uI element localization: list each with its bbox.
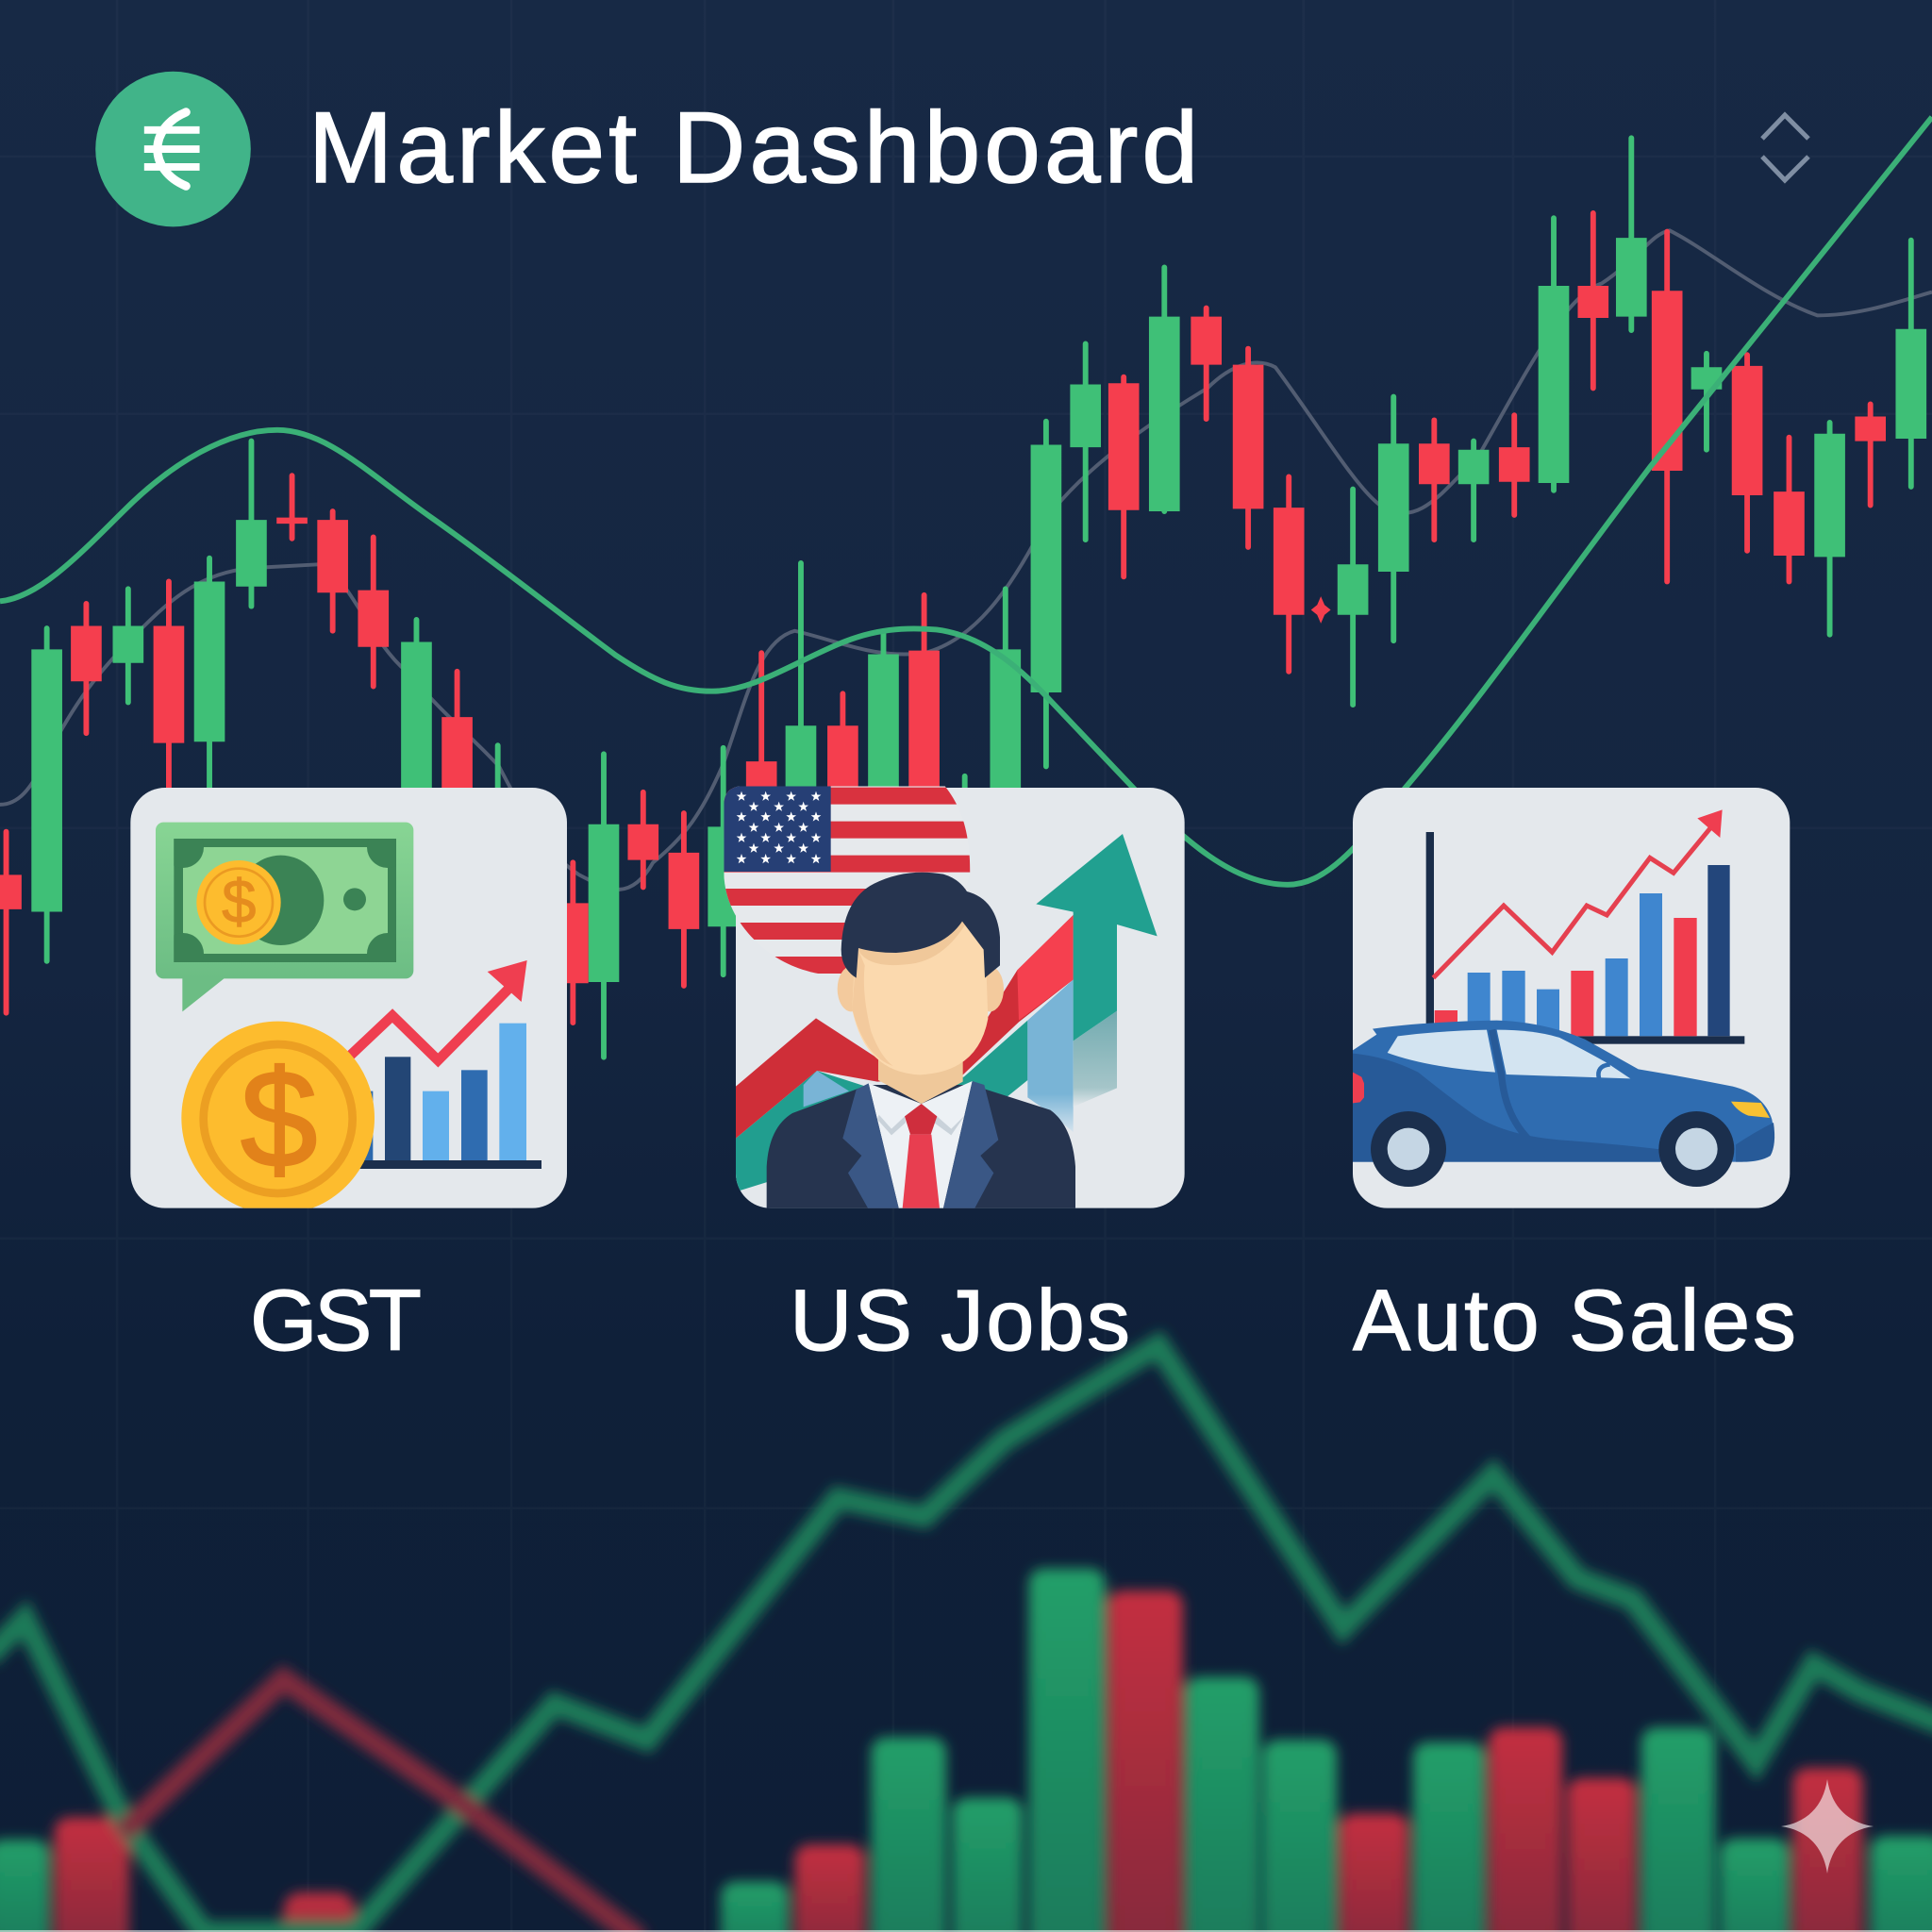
bar chart <box>1426 832 1744 1044</box>
icon: chevrons <box>1762 115 1808 180</box>
red candle wicks <box>7 213 1871 1023</box>
green candle wicks <box>47 138 1911 1058</box>
chart bands and arrow <box>736 834 1158 1191</box>
card: Auto Sales icon <box>1353 788 1790 1208</box>
icon: sparkle watermark <box>1781 1779 1874 1874</box>
green trend line <box>0 117 1932 885</box>
label: Auto Sales: Auto Sales <box>1353 1273 1796 1369</box>
gray moving average line <box>0 230 1932 890</box>
label: GST: GST <box>250 1273 422 1369</box>
blurred lower chart <box>0 1345 1932 1932</box>
header logo: euro badge <box>95 72 251 226</box>
blurred green bars <box>0 1569 1932 1932</box>
icon: banknote speech bubble: $ <box>222 867 257 936</box>
bottom edge strip <box>0 1930 1932 1932</box>
icon: large dollar coin <box>181 1022 375 1214</box>
card: GST icon <box>130 788 567 1214</box>
blurred red line <box>124 1679 641 1932</box>
small red doji candle <box>1311 596 1331 624</box>
card: US Jobs icon <box>724 786 1185 1208</box>
red candle bodies <box>7 286 1871 983</box>
icon: blue car <box>1353 1021 1774 1187</box>
icon: businessman <box>767 873 1075 1208</box>
icon: banknote speech bubble <box>156 823 413 1011</box>
green candle bodies <box>47 238 1911 982</box>
icon: large dollar coin: $ <box>241 1042 317 1197</box>
title: Market Dashboard <box>308 91 1198 204</box>
arrow: red trend <box>347 960 527 1060</box>
bar chart <box>346 1024 541 1169</box>
icon: US flag <box>724 786 975 978</box>
blurred green line <box>0 1345 1932 1932</box>
blurred red bars <box>54 1591 1863 1932</box>
arrow: red trend <box>1433 809 1723 978</box>
label: US Jobs: US Jobs <box>790 1273 1130 1369</box>
